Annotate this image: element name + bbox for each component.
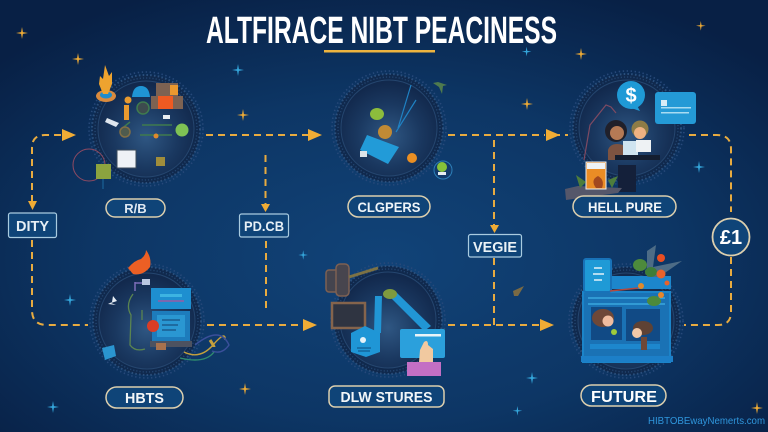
icon: flame on dish (96, 65, 116, 102)
box: VEGIE: VEGIE (473, 239, 517, 256)
icon: upper blue screen (151, 288, 191, 309)
icon: orange card with leaves (565, 162, 622, 200)
icon: green blob (370, 108, 384, 120)
icon: blue arm (374, 292, 431, 333)
icon: colored ribbon (180, 335, 229, 360)
icon: lower blue screen (150, 311, 192, 347)
icon: dark stand (618, 165, 636, 192)
icon: thin kite (584, 105, 616, 160)
panel: HBTS orb (90, 250, 229, 378)
label: DLW STURES (329, 386, 444, 407)
icon: tablet and hand (400, 329, 445, 376)
icon: character right (632, 321, 653, 350)
icon: orange flame (128, 250, 150, 274)
badge: pound one: £1 (720, 227, 742, 249)
icon: white card (105, 118, 119, 127)
icon: laptops (615, 140, 660, 160)
icon: white shape (108, 296, 117, 305)
box: PD.CB: PD.CB (244, 218, 284, 234)
label: CLGPERS: CLGPERS (358, 199, 420, 215)
icon: dark gears (326, 264, 378, 296)
icon: orange pillar (124, 96, 132, 120)
icon: character left (592, 309, 617, 335)
icon: green smile (176, 124, 188, 136)
icon: red badge (147, 320, 159, 332)
icon: dollar bubble: $ (625, 85, 637, 107)
arrowheads (28, 129, 560, 331)
label: CLGPERS (348, 196, 430, 217)
label: HELL PURE (573, 196, 676, 217)
box: DITY (8, 213, 56, 238)
icon: small orange gem (154, 134, 158, 138)
title: ALTFIRACE NIBT PEACINESS (206, 10, 557, 52)
panel: R/B orb (73, 65, 203, 189)
icon: yellow tile (156, 157, 165, 166)
box: DITY: DITY (16, 218, 49, 235)
panel: HELL PURE orb (565, 71, 696, 200)
box: PD.CB (240, 214, 288, 237)
icon: orange figure (378, 125, 392, 139)
label: HBTS: HBTS (125, 390, 164, 407)
icon: blue tablet (360, 135, 399, 164)
badge: pound one (712, 218, 750, 256)
icon: green badge (434, 161, 452, 179)
icon: sidebar card (584, 259, 611, 292)
label: FUTURE (581, 385, 666, 406)
panel: FUTURE orb (569, 245, 683, 378)
panel: CLGPERS orb (332, 71, 452, 185)
icon: vines (128, 294, 145, 350)
dashed connector arrows (32, 135, 731, 325)
icon: small figure (156, 343, 166, 350)
icon: orange flower (407, 153, 417, 163)
icon: browser window (581, 276, 673, 362)
icon: white tool (163, 115, 170, 119)
icon: side loop and monitor (73, 149, 111, 189)
label: DLW STURES: DLW STURES (340, 389, 432, 406)
icon: document (117, 150, 136, 168)
title underline (324, 50, 435, 52)
icon: white cube (360, 151, 367, 157)
panel: DLW STURES orb (326, 263, 445, 377)
label: R/B (106, 199, 165, 217)
icon: blue tile (102, 345, 116, 360)
icon: person right (632, 120, 648, 139)
icon: central network (120, 102, 172, 137)
icon: blue house tag (351, 326, 380, 357)
icon: dark panel (332, 303, 365, 328)
icon: leaves and sparks (610, 245, 682, 306)
label: HELL PURE: HELL PURE (588, 199, 662, 215)
icon: flag (135, 279, 150, 291)
box: VEGIE (468, 234, 522, 257)
icon: orange crates (151, 83, 183, 109)
icon: blue wires (396, 85, 416, 132)
icon: person left (605, 120, 628, 160)
icon: blue card (655, 92, 696, 124)
icon: small kite near VEGIE (513, 286, 524, 296)
icon: small kite (433, 82, 447, 94)
label: R/B: R/B (124, 201, 147, 216)
label: FUTURE: FUTURE (591, 389, 657, 406)
icon: blue dome (132, 86, 150, 97)
icon: green leaves (383, 289, 397, 299)
label: HBTS (106, 387, 183, 408)
